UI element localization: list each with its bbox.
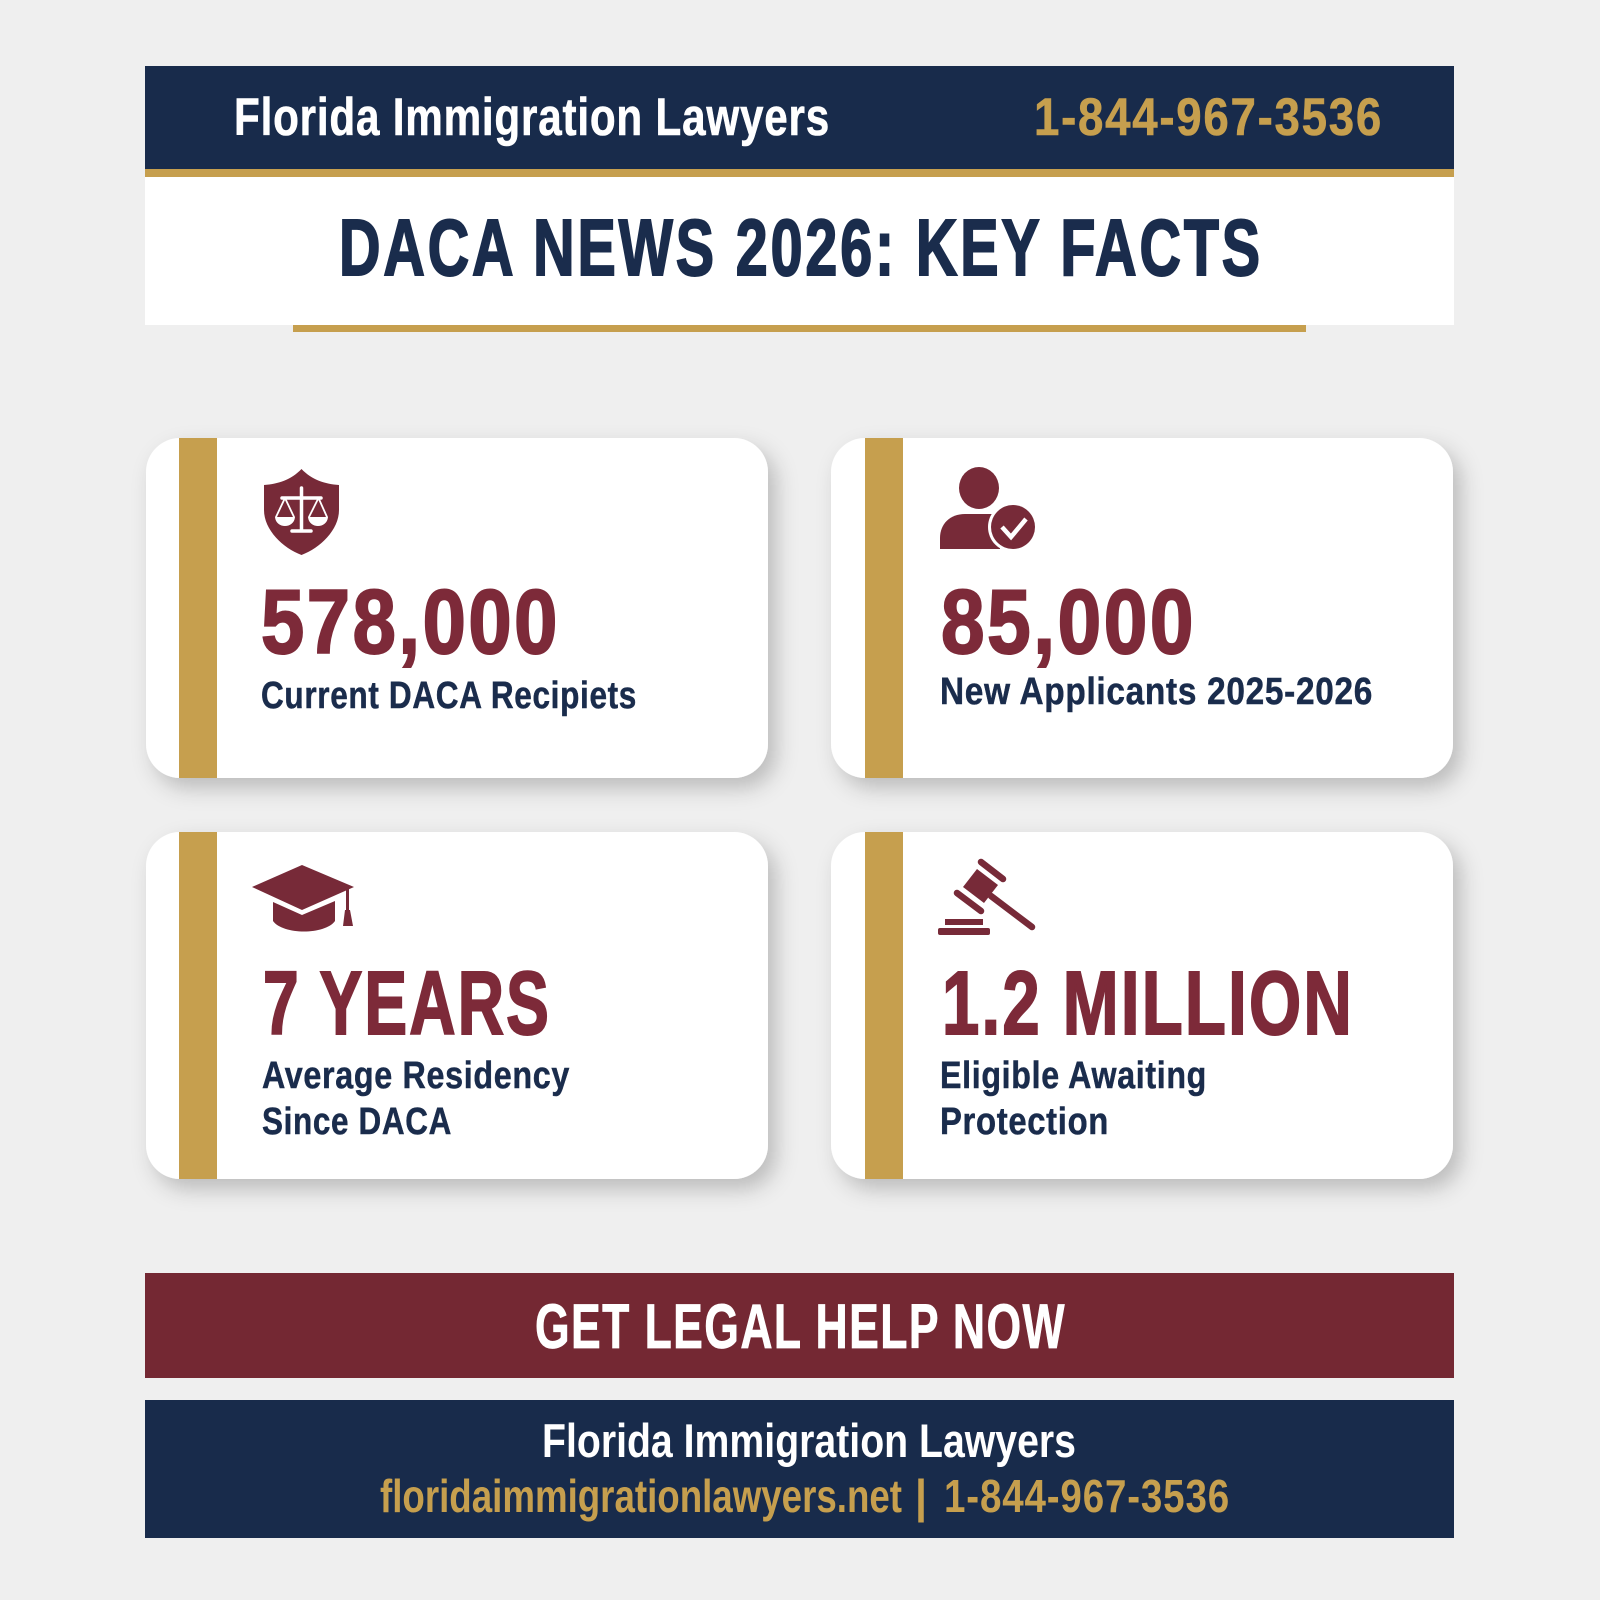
statistic: 85,000 (941, 572, 1196, 673)
icon: shield with scales (264, 469, 339, 555)
label line 2: Protection (940, 1101, 1109, 1143)
title: DACA NEWS 2026: KEY FACTS (339, 203, 1263, 292)
firm name: Florida Immigration Lawyers (234, 88, 830, 147)
footer divider: | (915, 1470, 927, 1522)
icon: graduation cap (252, 865, 354, 932)
footer phone: 1-844-967-3536 (944, 1470, 1230, 1522)
label: Average Residency (262, 1055, 570, 1097)
footer (145, 1400, 1454, 1538)
title panel (145, 177, 1454, 332)
label: New Applicants 2025-2026 (940, 671, 1373, 713)
footer firm name: Florida Immigration Lawyers (542, 1414, 1076, 1467)
icon: gavel (938, 862, 1032, 935)
icon: person with check (940, 467, 1038, 552)
label line 2: Since DACA (262, 1101, 452, 1143)
statistic: 578,000 (261, 572, 560, 673)
statistic: 7 YEARS (263, 954, 551, 1054)
header bar (145, 66, 1454, 177)
call to action text: GET LEGAL HELP NOW (535, 1292, 1066, 1362)
panel: recipients (146, 438, 768, 778)
label: Current DACA Recipiets (261, 675, 637, 717)
panel: applicants (831, 438, 1453, 778)
panel: eligible (831, 832, 1453, 1179)
panel: residency (146, 832, 768, 1179)
footer website: floridaimmigrationlawyers.net (380, 1470, 902, 1522)
call to action banner (145, 1273, 1454, 1378)
phone number: 1-844-967-3536 (1034, 88, 1383, 147)
label: Eligible Awaiting (940, 1055, 1207, 1097)
statistic: 1.2 MILLION (942, 954, 1354, 1054)
